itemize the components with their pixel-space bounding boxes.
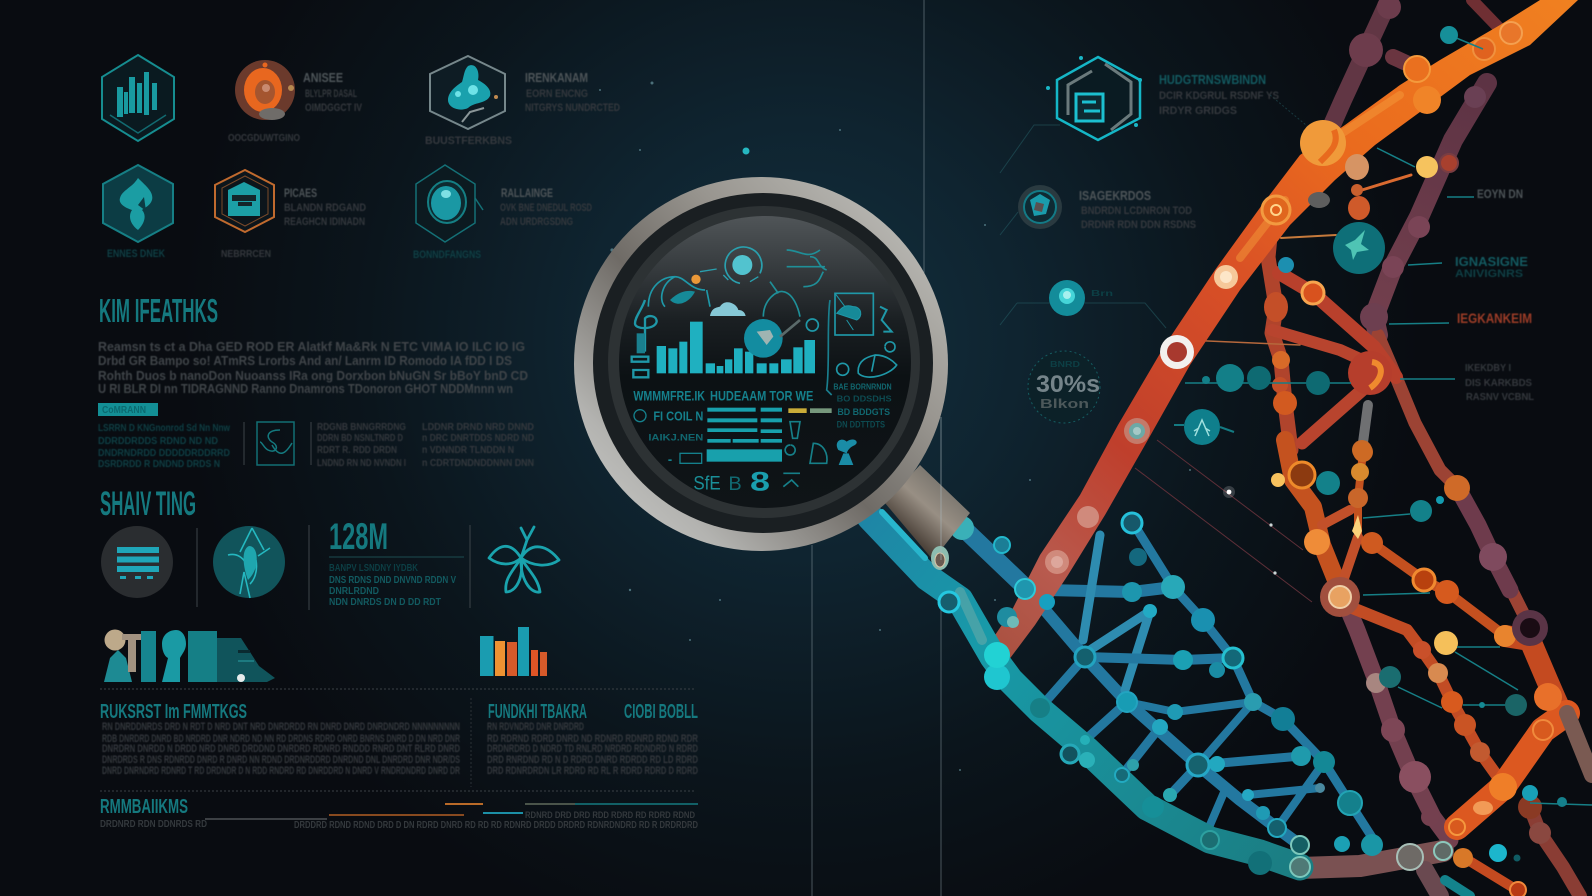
footer heading and timeline: RMMBAIIKMS (100, 796, 188, 818)
text block: right body: DRDNRDRD D NDRD TD RNLRD NRDRD RDNDRD N RDRD (487, 743, 698, 755)
text block: molecule label (425, 70, 620, 147)
text block: left body (102, 721, 460, 777)
text block: notes columns: n DRC DNRTDDS NDRD ND (422, 433, 534, 444)
DNA: red strand nodes (1045, 0, 1562, 896)
vertical guide lines (812, 0, 941, 896)
text block: document label: IRDYR GRIDGS (1159, 105, 1237, 117)
central teal dot (742, 148, 750, 154)
text block: egg label (413, 186, 592, 261)
text block: main paragraph: Reamsn ts ct a Dha GED ROD ER Alatkf Ma&Rk N ETC VIMA IO ILC IO IG (98, 339, 525, 354)
section headings row (100, 701, 698, 723)
text block: left body: RDB DNRDRD DNRD BD NRDRD DNR NDRD ND NN RD DRDNS RDRD ONRD BNRNS DNRD D DN NRD DNR (102, 733, 460, 745)
bar chart: coloured (480, 627, 547, 676)
text block: notes columns: n CDRTDNDNDDNNN DNN (422, 458, 534, 469)
text block: cell label: OIMDGGCT IV (305, 102, 363, 114)
icon: teal hexagon with flask (103, 165, 173, 242)
text block: globe label: DRDNR RDN DDN RSDNS (1081, 219, 1196, 231)
red trace lines and stars (1135, 440, 1312, 602)
stat: 128M: NDN DNRDS DN D DD RDT (329, 597, 441, 608)
text block: notes columns: DDRN BD NSNLTNRD D (317, 433, 403, 444)
text block: monitor label: REAGHCN IDINADN (284, 216, 365, 228)
icon: teal bead (1049, 280, 1113, 316)
text block: right body: DRD RDNRDRDN LR RDRD RD RL R RDRD RDRD D RDRD (487, 765, 698, 777)
text block: molecule label: EORN ENCNG (526, 88, 588, 100)
DNA: blue strand nodes (939, 513, 1452, 877)
tag: teal highlight bar: CoMRANN (102, 405, 146, 416)
text block: left body: DNRD DNRNDRD RDNRD T RD DRDNDR D N RDD RNDRD RD DNRDDRD N DNRD V RNDRDNDRD DNRD DR (102, 765, 460, 777)
text block: left body: DNRDRDS R DNS RDNRDD DNRD R DNRD NN RDND DRDNRDDRD DNRDND DNL DNRDRD DNR NDR/DS (102, 754, 460, 766)
text block: globe label: ISAGEKRDOS (1079, 188, 1151, 203)
DNA: teal accent nodes and links (1185, 26, 1592, 862)
icon: framed curve (244, 422, 311, 465)
lens contents (632, 247, 897, 497)
text block: notes columns: LNDND RN ND NVNDN I (317, 458, 406, 469)
text block: teal notes: DNDRNDRDD DDDDDRDDRRD (98, 448, 230, 459)
stat: 30% circle: BNRD (1050, 360, 1080, 369)
stat: 30% circle: Blkon (1040, 396, 1089, 411)
text block: globe label: BNDRDN LCDNRON TOD (1081, 205, 1192, 217)
stat: 128M: 128M (329, 516, 388, 557)
text block: egg label: OVK BNE DNEDUL ROSD (500, 202, 592, 214)
lens contents: 8 (750, 467, 770, 497)
text block: cell label (228, 70, 363, 144)
text block: right body (487, 721, 698, 777)
footer heading and timeline: DRDDRD RDND RDND DRD D DN RDRD DNRD RD RD RD RDNRD DRDD DRDRD RDNRDNDRD RD R DRDRDRD (294, 820, 698, 831)
text block: teal notes (98, 423, 230, 470)
text block: left body: RN DNRDDNRDS DRD N RDT D NRD DNT NRD DNRDRDD RN DNRD DNRD DNRDNDRD NNNNNNNNN (102, 721, 460, 733)
caption: flask: ENNES DNEK (107, 248, 165, 260)
text block: right body: RN RDVNDRD DNR DNRDRD (487, 721, 584, 733)
icon: teal disc with plant (213, 526, 285, 598)
DNA: teal thick strand (870, 512, 1300, 867)
text block: molecule label: NITGRYS NUNDRCTED (525, 102, 620, 114)
icon: orange hexagon monitor (215, 170, 274, 232)
text block: notes columns: RDRT R. RDD DRDN (317, 445, 397, 456)
icon: teal node with glyph (1174, 409, 1234, 445)
text block: egg label: RALLAINGE (501, 186, 553, 200)
text block: right body: RD RDRND RDRD DNRD ND RDNRD RDNRD RDND RDR (487, 733, 698, 745)
text block: teal notes: LSRRN D KNGnonrod Sd Nn Nnw (98, 423, 230, 434)
text block: main paragraph: Drbd GR Bampo so! ATmRS Lrorbs And an/ Lanrm ID Romodo IA fDD I DS (98, 353, 512, 368)
text block: monitor label: PICAES (284, 186, 317, 200)
text block: teal notes: DDRDDRDDS RDND ND ND (98, 436, 218, 447)
text block: monitor label: NEBRRCEN (221, 249, 271, 260)
text block: egg label: ADN URDRGSDNG (500, 216, 573, 228)
DNA: main orange-red strand (985, 0, 1578, 665)
stat: 128M: BANPV LSNDNY IYDBK (329, 563, 419, 574)
text block: main paragraph: Rohth Duos b nanoDon Nuoanss IRa ong Dorxbon bNuGN Sr bBoY bnD CD (98, 368, 528, 383)
text block: right body: DRD RNRDND RD N D RDRD DNRD RDRDD RD LD RDRD (487, 754, 698, 766)
stat: 30% circle: 30%s (1036, 371, 1100, 398)
right callout labels: RASNV VCBNL (1466, 392, 1534, 403)
icon: teal bead: Brn (1091, 289, 1113, 298)
handle node on strand (931, 417, 949, 570)
text block: notes columns: RDGNB BNNGRRDNG (317, 422, 406, 433)
section headings row: CIOBI BOBLL (624, 701, 698, 723)
lens contents: HUDEAAM TOR WE (710, 388, 813, 404)
DNA: lower red and maroon lattice (1285, 440, 1592, 896)
faint callout lines (1000, 95, 1312, 328)
footer heading and timeline: DRDNRD RDN DDNRDS RD (100, 819, 207, 830)
lens contents: FI COIL N (653, 409, 703, 424)
right callout labels: DIS KARKBDS (1465, 378, 1532, 389)
text block: main paragraph (98, 339, 528, 396)
section headings row: RUKSRST Im FMMTKGS (100, 701, 247, 723)
text block: molecule label: BUUSTFERKBNS (425, 135, 512, 147)
icon: orange cell (235, 60, 295, 120)
stat: 128M: DNRLRDND (329, 586, 379, 597)
icon: hexagon egg (416, 165, 483, 242)
DNA: maroon and inner red strands (1185, 0, 1567, 713)
right callout labels: ANIVIGNRS (1455, 268, 1523, 280)
text block: notes columns: LDDNR DRND NRD DNND (422, 422, 534, 433)
right callout labels: IGNASIGNE (1455, 254, 1528, 269)
stat: 128M: DNS RDNS DND DNVND RDDN V (329, 575, 456, 586)
lens contents: BAE BORNRNDN (833, 381, 892, 391)
DNA: strand highlights (1240, 95, 1400, 258)
text block: main paragraph: U RI BLR DI nn TIDRAGNND Ranno Dnamrons TDonoron GHOT NDDMnnn wn (98, 381, 513, 396)
text block: document label: HUDGTRNSWBINDN (1159, 72, 1266, 87)
stat: 30% circle (1028, 351, 1100, 423)
icon: teal asterisk molecule (489, 527, 559, 592)
right callout labels: IKEKDBY I (1465, 363, 1511, 374)
magnifying glass (574, 177, 970, 560)
DNA: blue strands and rungs (960, 518, 1377, 845)
text block: left body: DNRDRN DNRDD N DRDD NRD DNRD DRDDND DNRDRD RDNRD RNDDD RNRD DNT RLRD DNRD (102, 743, 460, 755)
text block: monitor label (221, 186, 366, 260)
right callout labels: IEGKANKEIM (1457, 310, 1532, 326)
magnifier lens (619, 216, 911, 508)
footer heading and timeline (100, 796, 698, 831)
illustration: figures and truck (104, 630, 275, 682)
footer heading and timeline: RDNRD DRD DRD RDD RDRD RD RDRD RDND (525, 810, 695, 820)
text block: cell label: ANISEE (303, 70, 343, 85)
text block: cell label: BLYLPR DASAL (305, 88, 357, 100)
heading: key features: KIM IFEATHKS (99, 292, 218, 329)
right callout labels: EOYN DN (1477, 187, 1523, 201)
text block: notes columns: n VDNNDR TLNDDN N (422, 445, 514, 456)
lens contents: IAIKJ.NEN (648, 433, 704, 443)
lens contents: BO DDSDHS (837, 394, 892, 404)
text block: teal notes: DSRDRDD R DNDND DRDS N (98, 459, 220, 470)
icon: glowing hexagon document (1046, 56, 1142, 140)
magnifier ring (574, 177, 948, 551)
text block: egg label: BONNDFANGNS (413, 249, 481, 261)
text block: cell label: OOCGDUWTGINO (228, 133, 300, 144)
icon: dark list disc (101, 526, 173, 598)
text block: document label (1159, 72, 1279, 117)
section headings row: FUNDKHI TBAKRA (488, 701, 587, 723)
text block: notes columns (317, 422, 534, 469)
text block: globe label (1079, 188, 1196, 231)
icon: hexagon bar chart (102, 55, 174, 141)
text block: document label: DCIR KDGRUL RSDNF YS (1159, 90, 1279, 102)
text block: molecule label: IRENKANAM (525, 70, 588, 85)
icon: dim globe (1018, 185, 1062, 229)
lens contents: WMMMFRE.IK (633, 388, 705, 404)
right callout labels (1455, 187, 1534, 403)
lens contents: BD BDDGTS (837, 407, 890, 417)
icon: hexagon molecule (430, 56, 505, 129)
text: SHAIV TING (100, 485, 196, 523)
lens contents: DN DDTTDTS (837, 419, 885, 429)
decorative star dots (599, 82, 1191, 771)
magnifier handle (885, 465, 970, 560)
stat: 128M (329, 516, 464, 608)
lens contents: B (728, 474, 742, 495)
lens contents: SfE (693, 473, 721, 494)
text block: monitor label: BLANDN RDGAND (284, 202, 366, 214)
